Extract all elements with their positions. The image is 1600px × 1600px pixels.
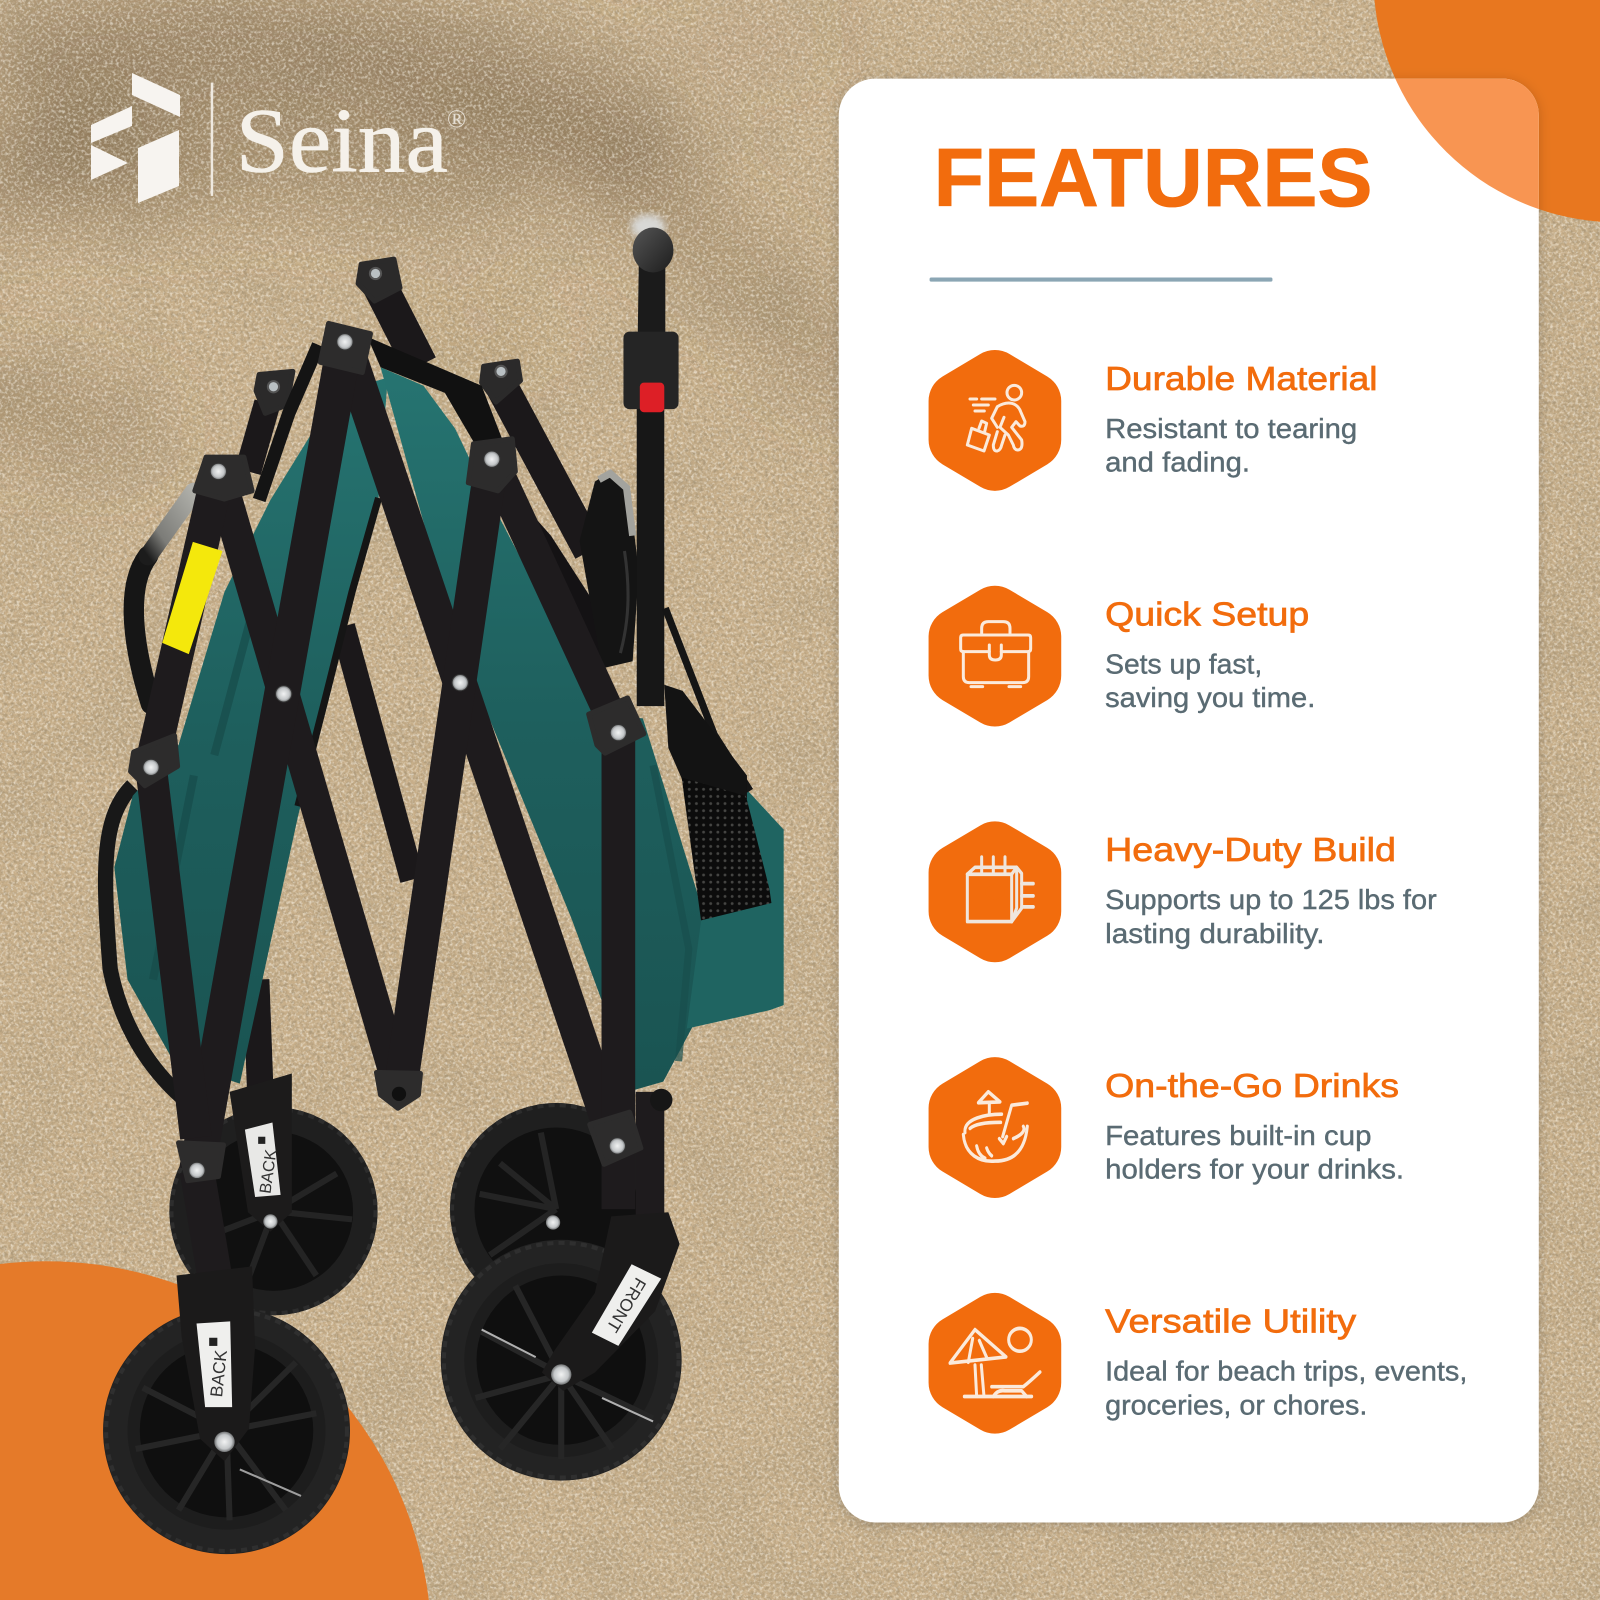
description: Resistant to tearing	[1105, 413, 1357, 444]
rear front caster hub	[546, 1215, 560, 1230]
knob	[633, 228, 673, 272]
feature: Durable Material	[957, 361, 1378, 477]
description: Features built-in cup	[1105, 1120, 1371, 1151]
description: holders for your drinks.	[1105, 1154, 1404, 1185]
red button	[640, 383, 664, 412]
rear back wheel	[169, 1107, 378, 1315]
lock block	[623, 332, 679, 409]
front label	[592, 1264, 661, 1346]
rear front wheel	[450, 1103, 662, 1315]
axle ball	[650, 1089, 672, 1111]
logo wordmark: Seina	[236, 89, 448, 191]
title: Heavy-Duty Build	[1105, 832, 1396, 869]
feature: Heavy-Duty Build	[957, 832, 1437, 949]
heading divider	[930, 278, 1272, 282]
main scissor frame bars	[151, 342, 650, 1286]
right handle	[580, 471, 639, 668]
knob ghost blur	[631, 214, 665, 239]
registered mark: ®	[447, 105, 466, 134]
near back wheel	[103, 1307, 350, 1554]
card background	[839, 79, 1539, 1522]
icon: beach umbrella and lounger	[950, 1321, 1040, 1405]
logo mark	[91, 73, 180, 203]
description: Ideal for beach trips, events,	[1105, 1356, 1467, 1387]
card corner tint	[1395, 78, 1539, 210]
description: lasting durability.	[1105, 918, 1324, 949]
icon: chip	[957, 850, 1033, 934]
decorative orange circle: top right	[1374, 0, 1600, 222]
rear back caster fork	[230, 1073, 292, 1232]
title: Durable Material	[1105, 361, 1378, 398]
zipper edge	[106, 786, 182, 1097]
heading: FEATURES: FEATURES	[934, 131, 1372, 224]
icon: runner with suitcase	[957, 379, 1033, 462]
black fabric edge left	[259, 345, 318, 500]
lower stem	[637, 408, 664, 706]
yellow warning label	[162, 542, 222, 654]
icon: coconut drink	[957, 1086, 1033, 1169]
dark inner panel	[510, 490, 604, 704]
near front caster fork: FRONT	[602, 1274, 650, 1336]
left handle	[134, 492, 194, 704]
description: groceries, or chores.	[1105, 1389, 1367, 1420]
description: and fading.	[1105, 446, 1250, 477]
feature: On-the-Go Drinks	[957, 1068, 1404, 1185]
frame bolts	[143, 334, 627, 1179]
feature: Quick Setup	[957, 597, 1315, 713]
side pouch teal	[687, 789, 784, 1029]
folded wagon illustration	[103, 214, 784, 1554]
pouch strap	[665, 608, 750, 791]
title: Versatile Utility	[1105, 1304, 1356, 1341]
description: Sets up fast,	[1105, 648, 1262, 679]
icon: toolbox	[957, 614, 1033, 698]
logo: Seina	[91, 73, 466, 203]
back label near	[197, 1321, 232, 1407]
description: saving you time.	[1105, 682, 1315, 713]
near front caster fork	[542, 1212, 680, 1391]
decorative orange circle: bottom left	[0, 1261, 429, 1600]
top black padded band	[367, 337, 502, 447]
right fabric	[381, 367, 704, 1090]
feature: Versatile Utility	[950, 1304, 1467, 1420]
back label rear	[245, 1122, 281, 1197]
logo divider	[211, 83, 213, 196]
back scissor bars	[248, 276, 590, 1090]
near back caster fork: BACK	[206, 1349, 231, 1398]
near front wheel	[441, 1240, 682, 1481]
title: Quick Setup	[1105, 597, 1309, 634]
fabric folds left	[153, 571, 316, 980]
panel: features card	[834, 76, 1544, 1530]
mesh pocket	[682, 778, 771, 920]
back corner caps	[256, 259, 520, 413]
main caps	[131, 323, 644, 1181]
telescoping handle	[623, 214, 679, 706]
foot screw	[392, 1087, 406, 1101]
black pouch top	[664, 685, 747, 799]
upper stem	[638, 263, 665, 335]
rear back caster fork: BACK	[256, 1148, 280, 1195]
near back caster fork	[177, 1266, 255, 1461]
title: On-the-Go Drinks	[1105, 1068, 1399, 1105]
description: Supports up to 125 lbs for	[1105, 884, 1437, 915]
left fabric	[114, 378, 388, 1084]
back corner bolts	[268, 268, 507, 392]
